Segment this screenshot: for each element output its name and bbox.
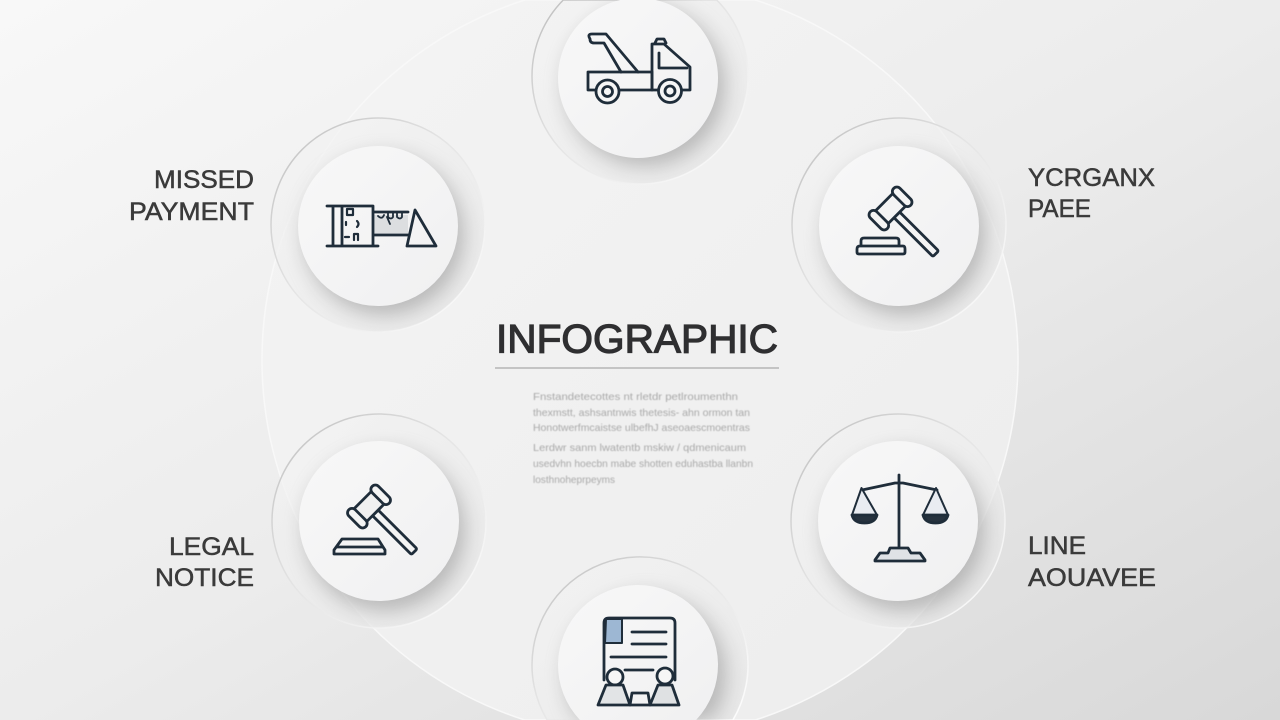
description text block: Honotwerfmcaistse ulbefhJ aseoaescmoentras bbox=[533, 422, 750, 434]
label: lower right bbox=[1028, 532, 1156, 592]
description text block: usedvhn hoecbn mabe shotten eduhastba llanbn bbox=[533, 458, 753, 470]
label: legal notice bbox=[155, 533, 254, 592]
label: lower right: LINE bbox=[1028, 532, 1086, 560]
title: INFOGRAPHIC bbox=[496, 318, 778, 362]
label: legal notice: NOTICE bbox=[155, 564, 254, 592]
node: legal notice (lower left) bbox=[272, 414, 486, 628]
icon: calendar and warning sign bbox=[327, 206, 436, 246]
icon: document with two people bbox=[598, 618, 679, 705]
description text block bbox=[533, 391, 753, 486]
label: legal notice: LEGAL bbox=[169, 533, 254, 561]
label: missed payment: PAYMENT bbox=[129, 198, 254, 226]
node: tow truck (top) bbox=[532, 0, 748, 184]
description text block: losthnoheprpeyms bbox=[533, 474, 615, 486]
label: upper right: PAEE bbox=[1028, 195, 1091, 223]
description text block: Lerdwr sanm lwatentb mskiw / qdmenicaum bbox=[533, 442, 746, 454]
icon: balance scales bbox=[852, 475, 948, 561]
node: scales (lower right) bbox=[791, 414, 1005, 628]
label: upper right: YCRGANX bbox=[1028, 164, 1155, 192]
node: gavel (upper right) bbox=[792, 118, 1006, 332]
description text block: thexmstt, ashsantnwis thetesis- ahn ormon tan bbox=[533, 407, 750, 419]
title underline bbox=[495, 367, 779, 369]
label: lower right: AOUAVEE bbox=[1028, 564, 1156, 592]
icon: gavel bbox=[334, 483, 429, 567]
node: missed payment (upper left) bbox=[271, 118, 485, 332]
central large circle panel bbox=[262, 0, 1018, 720]
node: contract with people (bottom) bbox=[532, 557, 748, 720]
label: missed payment: MISSED bbox=[154, 166, 254, 194]
icon: tow truck bbox=[588, 34, 690, 103]
label: upper right bbox=[1028, 164, 1155, 223]
label: missed payment bbox=[129, 166, 254, 226]
description text block: Fnstandetecottes nt rletdr petlroumenthn bbox=[533, 391, 738, 403]
icon: gavel bbox=[857, 185, 951, 269]
